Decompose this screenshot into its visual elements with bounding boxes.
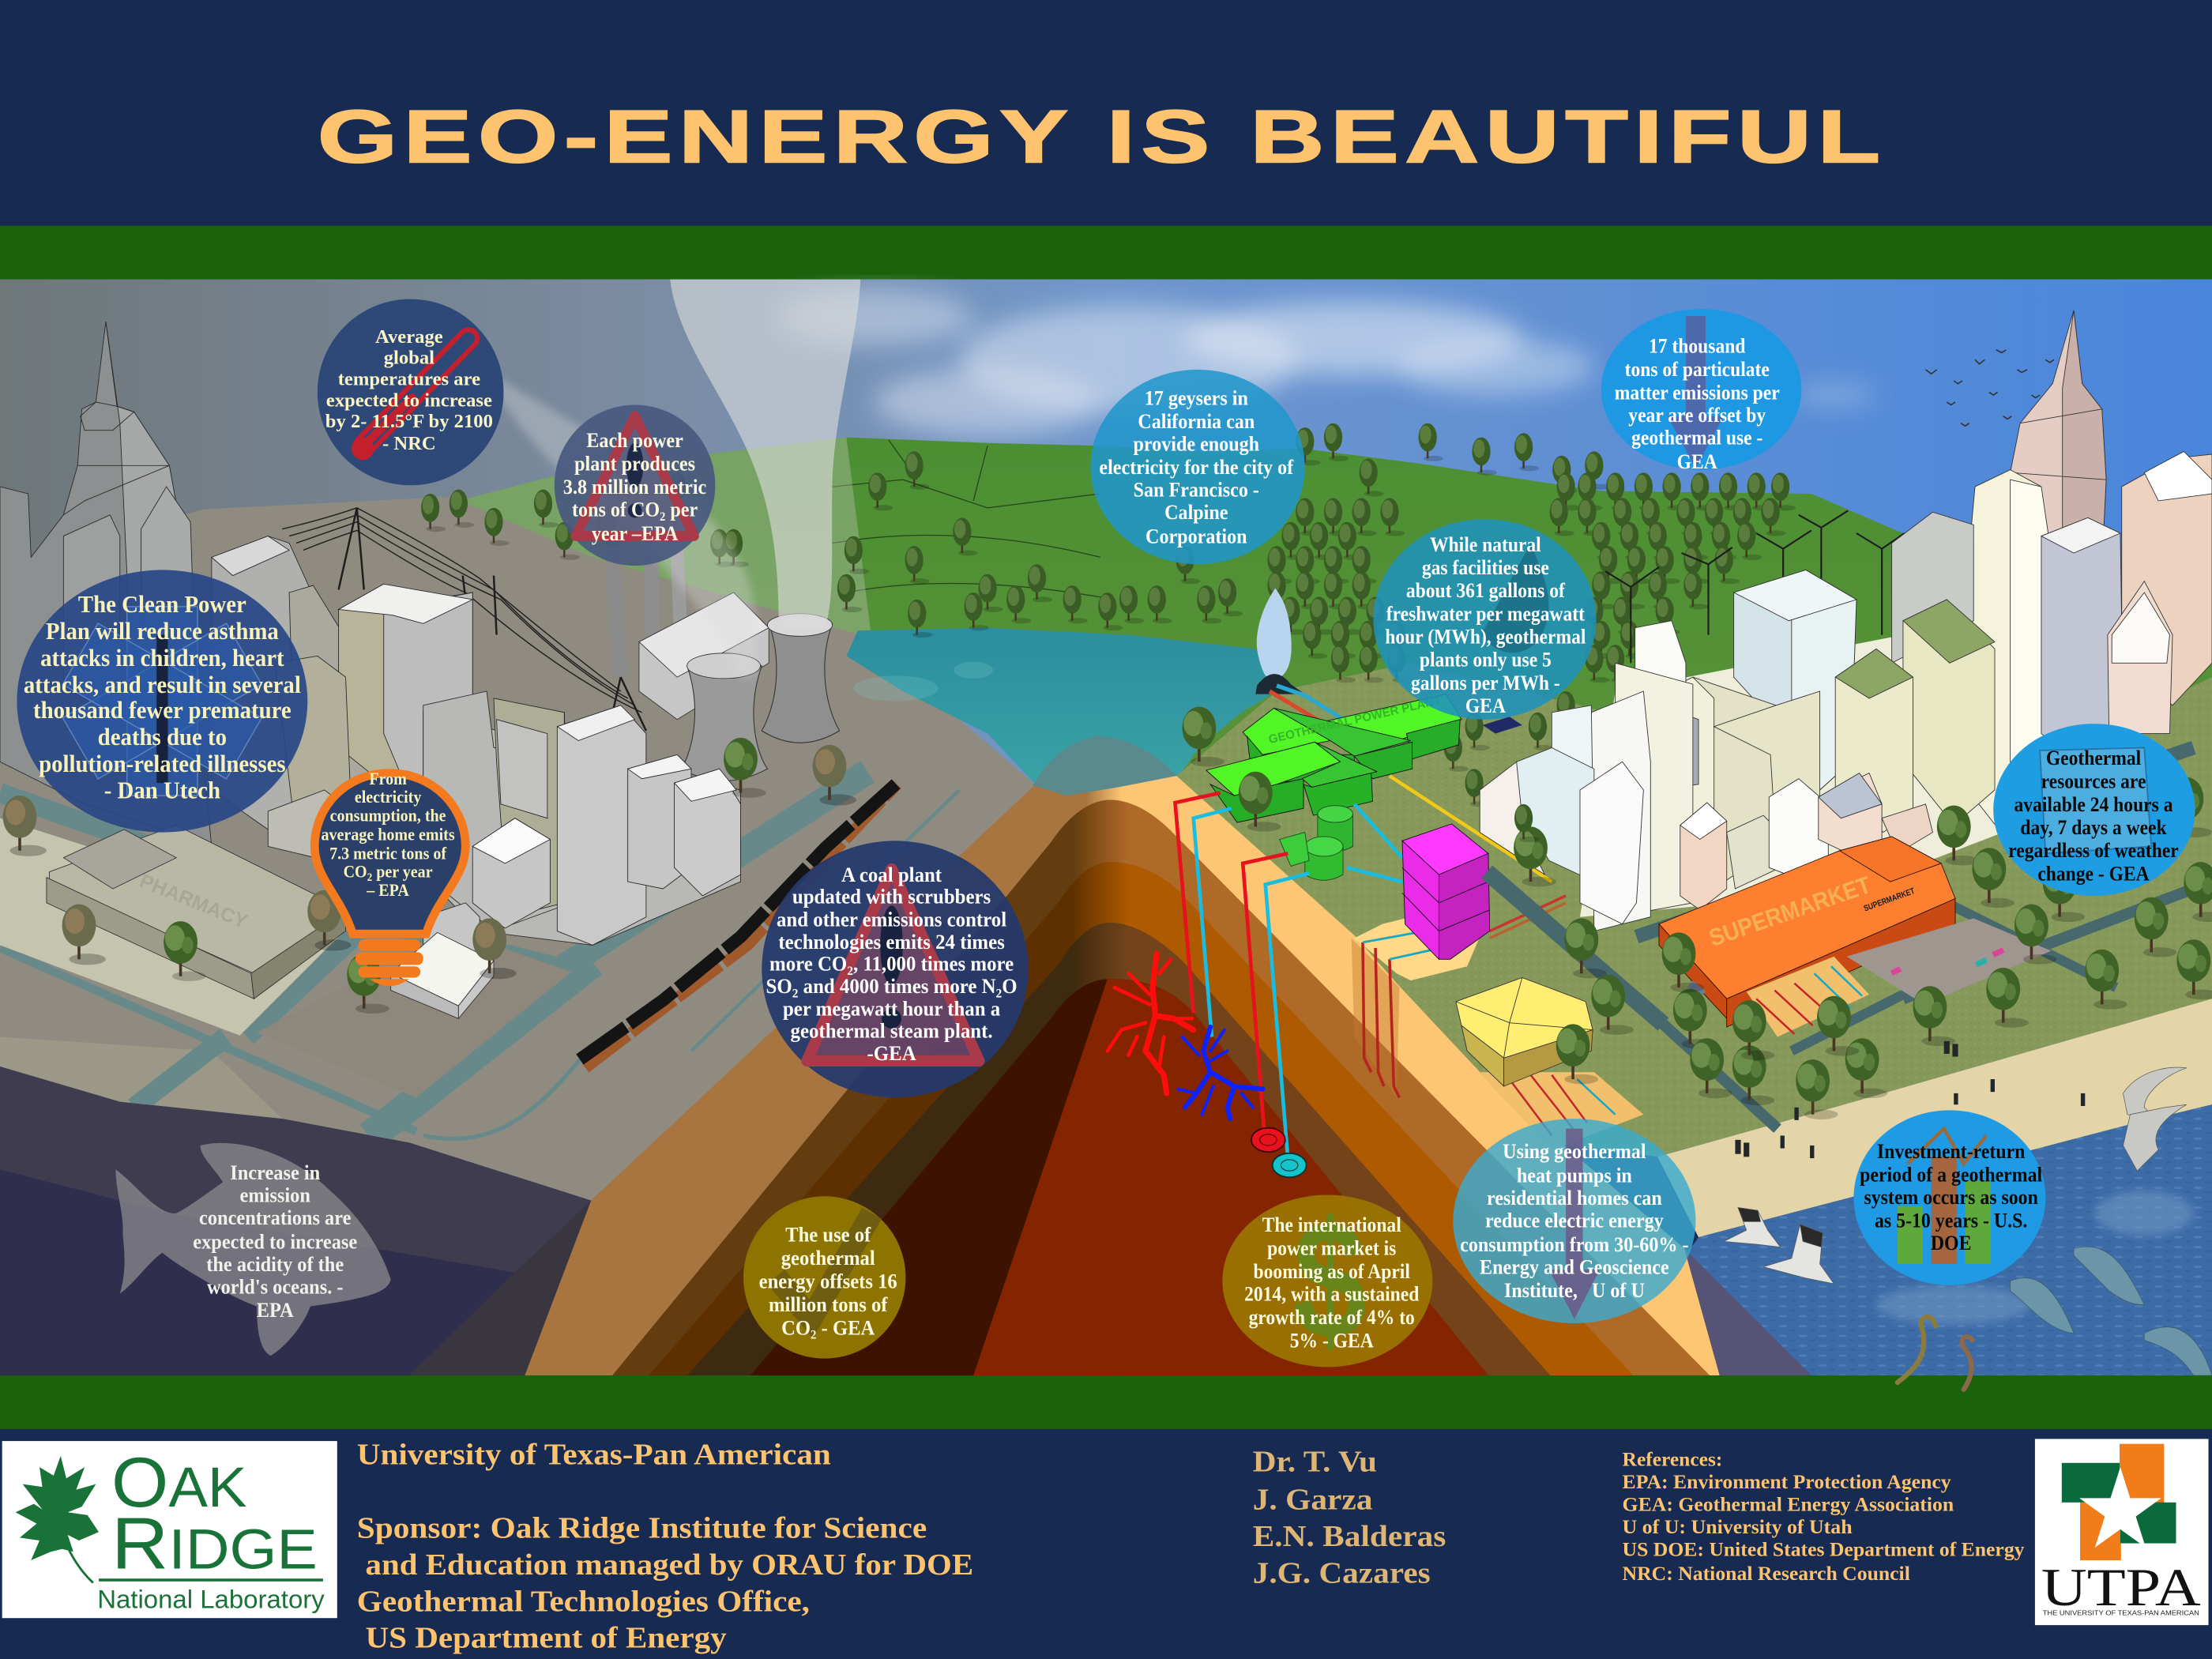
bubble: coal plant comparison: , 11,000 times more: [853, 953, 1014, 976]
icon: dollar sign: $: [1293, 1187, 1367, 1373]
callout: fish ocean acidity: EPA: [257, 1298, 294, 1322]
bubble: international power market: [1222, 1187, 1432, 1373]
author names: [1253, 1446, 1446, 1590]
geyser: [1255, 589, 1354, 734]
right sea: [1687, 1104, 2212, 1375]
right grass plain: [1176, 663, 2212, 1157]
bubble: coal plant comparison: 2: [996, 987, 1002, 1001]
bubble: coal plant comparison: O: [1002, 976, 1018, 998]
bubble: international power market: 5% - GEA: [1290, 1330, 1374, 1352]
bubble: each power plant: Each power: [586, 428, 683, 452]
icon: star of life: [62, 607, 261, 796]
bubble: clean power plan: The Clean Power: [78, 592, 246, 618]
dark shore and sea left: [0, 1066, 591, 1375]
icon: down arrow: [1668, 316, 1724, 468]
bubble: 24-hour resources: change - GEA: [2037, 863, 2150, 886]
bubble: 17 geysers: Calpine: [1164, 500, 1228, 524]
logo: UTPA: UTPA: [2041, 1558, 2201, 1617]
bubble: coal plant comparison: -GEA: [867, 1043, 916, 1065]
bubble: investment return: system occurs as soon: [1864, 1186, 2038, 1209]
solar panels: [1483, 717, 1522, 734]
right city streets: [1487, 747, 2212, 1129]
bubble: clean power plan: attacks, and result in several: [24, 672, 301, 698]
bubble: each power plant: 2: [660, 510, 665, 524]
references: NRC: National Research Council: [1623, 1563, 1910, 1585]
callout: fish ocean acidity: world's oceans. -: [207, 1274, 343, 1299]
pharmacy lot: [0, 818, 346, 1036]
lake: [846, 628, 1277, 786]
footer background: [0, 1429, 2212, 1659]
bubble: light bulb home emissions: average home emits: [322, 825, 455, 845]
bubble: light bulb home emissions: From: [369, 769, 407, 788]
sponsor text block: Geothermal Technologies Office,: [357, 1585, 810, 1618]
references: US DOE: United States Department of Energy: [1623, 1540, 2025, 1561]
parked cars: [1687, 947, 2004, 998]
bubble: thermometer global temperatures: by 2- 11.5°F by 2100: [325, 411, 493, 432]
bubble: 17 geysers: electricity for the city of: [1099, 455, 1294, 479]
bubble: coal plant comparison: and 4000 times more N: [798, 976, 996, 998]
bubble: light bulb home emissions: CO: [344, 862, 433, 883]
logo: Oak Ridge National Laboratory: National Laboratory: [97, 1586, 325, 1614]
coal train: [580, 781, 899, 1068]
bubble: 17 geysers: 17 geysers in: [1145, 386, 1248, 410]
shoals of fish in the lake: [853, 662, 993, 702]
bubble: light bulb home emissions: consumption, the: [330, 806, 446, 825]
references: [1623, 1449, 2025, 1585]
title: GEO-ENERGY IS BEAUTIFUL: [318, 95, 1887, 179]
pharmacy building: PHARMACY: [137, 870, 250, 933]
bubble: natural gas versus geothermal water use: plants only use 5: [1420, 649, 1552, 672]
bubble: each power plant: [555, 404, 715, 566]
bubble: particulate matter offset: [1601, 309, 1801, 473]
bubble: international power market: 2014, with a sustained: [1244, 1283, 1419, 1306]
bubble: 24-hour resources: regardless of weather: [2008, 840, 2179, 862]
bubble: each power plant: per: [665, 497, 698, 521]
plant tree front: [1239, 772, 1281, 832]
sponsor text block: Sponsor: Oak Ridge Institute for Science: [357, 1511, 927, 1544]
bubble: particulate matter offset: year are offset by: [1628, 404, 1766, 427]
bubble: each power plant: plant produces: [574, 451, 695, 476]
mound above the cross-section: [1033, 736, 1176, 799]
purple wedge: [1684, 1248, 1811, 1375]
cross-section earth layers: [525, 776, 1720, 1375]
references: GEA: Geothermal Energy Association: [1623, 1494, 1954, 1515]
icon: calendar: [2040, 747, 2151, 853]
icon: water drop: [1481, 544, 1548, 653]
bubble: geothermal heat pumps: consumption from 30-60% -: [1460, 1232, 1689, 1256]
green hillside: [438, 438, 2212, 1016]
sky: [0, 280, 2212, 844]
yellow house: [1456, 978, 1593, 1086]
logo: UTPA: THE UNIVERSITY OF TEXAS-PAN AMERICAN: [2043, 1610, 2199, 1617]
blue fracture tree: [1178, 1027, 1262, 1119]
header background: [0, 0, 2212, 226]
sponsor text block: US Department of Energy: [365, 1622, 727, 1655]
bubble: geothermal heat pumps: residential homes can: [1487, 1186, 1662, 1209]
bubble: natural gas versus geothermal water use: While natural: [1430, 534, 1541, 557]
icon: fish silhouette: [115, 1143, 391, 1356]
front trees: [1514, 777, 2212, 1119]
bubble: geothermal offsets CO2: - GEA: [816, 1315, 875, 1340]
bubble: natural gas versus geothermal water use: GEA: [1465, 694, 1507, 717]
red fracture tree: [1108, 954, 1194, 1093]
references: U of U: University of Utah: [1623, 1517, 1853, 1538]
bubble: international power market: The international: [1262, 1214, 1401, 1236]
pipe terminals: [1251, 1128, 1307, 1177]
author names: J. Garza: [1253, 1484, 1373, 1517]
bubble: international power market: growth rate of 4% to: [1249, 1307, 1415, 1329]
top green band: [0, 226, 2212, 280]
bubble: investment return: DOE: [1931, 1232, 1971, 1255]
icon: light bulb: [314, 773, 465, 986]
bubble: natural gas versus geothermal water use: hour (MWh), geothermal: [1385, 626, 1586, 649]
bubble: clean power plan: attacks in children, heart: [40, 645, 284, 672]
magenta building: [1402, 824, 1490, 959]
bubble: thermometer global temperatures: Average: [375, 326, 443, 348]
hillside trees: [421, 423, 1796, 807]
haze over left hillside: [438, 438, 875, 663]
bubble: natural gas versus geothermal water use: freshwater per megawatt: [1386, 603, 1586, 626]
bubble: particulate matter offset: 17 thousand: [1649, 335, 1745, 358]
bubble: geothermal offsets CO2: The use of: [785, 1222, 871, 1247]
transmission lines: [282, 508, 646, 731]
yellow utility line: [1390, 776, 1552, 882]
icon: warning triangle: [576, 416, 694, 536]
icon: warning triangle: [807, 869, 979, 1061]
icon: thermometer: [352, 339, 468, 460]
bubble: coal plant comparison: [762, 841, 1029, 1097]
bubble: thermometer global temperatures: temperatures are: [338, 368, 480, 389]
ground loops: [1478, 957, 1869, 1149]
bubble: light bulb home emissions: 7.3 metric tons of: [329, 844, 447, 863]
bubble: geothermal offsets CO2: [743, 1196, 905, 1359]
bottom green band: [0, 1375, 2212, 1429]
bubble: clean power plan: thousand fewer premature: [33, 698, 292, 724]
bubble: coal plant comparison: A coal plant: [841, 864, 942, 886]
logo: Oak Ridge National Laboratory: OAK: [111, 1443, 246, 1522]
right sand beach: [1657, 999, 2212, 1237]
bubble: clean power plan: - Dan Utech: [104, 778, 221, 804]
sponsor text block: [357, 1439, 973, 1655]
bubble: light bulb home emissions: [314, 769, 465, 986]
bubble: particulate matter offset: geothermal use -: [1631, 427, 1762, 450]
bubble: international power market: power market is: [1267, 1237, 1396, 1260]
bubble: coal plant comparison: and other emissions control: [777, 908, 1006, 931]
callout: fish ocean acidity: concentrations are: [199, 1206, 351, 1229]
right city buildings: [1480, 310, 2212, 931]
logo: Oak Ridge National Laboratory: [2, 1441, 337, 1618]
bubble: each power plant: year –EPA: [592, 521, 679, 545]
pharmacy building: [47, 826, 346, 999]
bubble: clean power plan: deaths due to: [98, 724, 227, 750]
bubble: geothermal heat pumps: Using geothermal: [1503, 1139, 1646, 1163]
hill field lines: [833, 440, 1115, 600]
bubble: thermometer global temperatures: - NRC: [382, 433, 436, 454]
bubble: natural gas versus geothermal water use: about 361 gallons of: [1406, 580, 1565, 603]
callout: fish ocean acidity: the acidity of the: [206, 1252, 344, 1276]
bubble: 17 geysers: [1090, 370, 1305, 564]
author names: E.N. Balderas: [1253, 1520, 1446, 1553]
supermarket: SUPERMARKET: [1863, 886, 1917, 913]
left street trees: [3, 738, 856, 1014]
icon: down arrow: [1549, 1129, 1600, 1319]
parking lot: [1847, 918, 2051, 1004]
bubble: geothermal heat pumps: Energy and Geoscience: [1480, 1255, 1669, 1279]
bubble: each power plant: tons of CO: [572, 497, 698, 524]
bubble: light bulb home emissions: per year: [372, 862, 433, 882]
birds in the sky: [1926, 350, 2054, 426]
bubble: thermometer global temperatures: [318, 299, 504, 485]
bubble: thermometer global temperatures: global: [384, 348, 434, 369]
bubble: 17 geysers: San Francisco -: [1134, 477, 1259, 502]
callout: fish ocean acidity: [115, 1143, 391, 1356]
bubble: light bulb home emissions: electricity: [355, 787, 422, 807]
geothermal power plant: [1206, 694, 1462, 822]
callout: fish ocean acidity: emission: [240, 1183, 310, 1207]
bubble: coal plant comparison: more CO: [769, 953, 1014, 978]
bubble: investment return: period of a geothermal: [1860, 1163, 2042, 1187]
house lot: [257, 930, 571, 1097]
bubble: coal plant comparison: 2: [847, 965, 853, 978]
geothermal power plant: GEOTHERMAL POWER PLANT: [1267, 694, 1443, 747]
power plant with chimneys and cooling towers: [605, 536, 839, 781]
bubble: particulate matter offset: matter emissions per: [1615, 382, 1780, 404]
sponsor text block: University of Texas-Pan American: [357, 1439, 831, 1472]
bubble: geothermal offsets CO2: CO: [781, 1315, 875, 1342]
bubble: thermometer global temperatures: expected to increase: [326, 389, 492, 411]
left ground: [0, 497, 1036, 1201]
bubble: coal plant comparison: SO: [766, 976, 1018, 1001]
bubble: coal plant comparison: 2: [792, 987, 799, 1001]
bubble: geothermal offsets CO2: million tons of: [769, 1292, 888, 1316]
bubble: 24-hour resources: day, 7 days a week: [2020, 817, 2167, 840]
author names: J.G. Cazares: [1253, 1557, 1431, 1590]
bubble: 24-hour resources: Geothermal: [2046, 747, 2141, 769]
people on beach: [1735, 1041, 2085, 1158]
smoke plumes: [480, 280, 860, 677]
callout: fish ocean acidity: Increase in: [230, 1161, 320, 1184]
callout: fish ocean acidity: expected to increase: [193, 1229, 357, 1254]
bubble: geothermal offsets CO2: geothermal: [781, 1246, 875, 1270]
bubble: particulate matter offset: GEA: [1677, 451, 1717, 473]
bubble: geothermal heat pumps: Institute, U of U: [1504, 1278, 1645, 1302]
wind turbines: [1605, 510, 1905, 663]
logo: UTPA: [2035, 1439, 2209, 1625]
bubble: 17 geysers: California can: [1138, 409, 1255, 433]
icon: bar chart with trend arrow: [1898, 1129, 1991, 1264]
storage tanks: [1280, 806, 1352, 880]
bubble: investment return: Investment-return: [1877, 1140, 2025, 1163]
bubble: 17 geysers: Corporation: [1146, 524, 1247, 548]
bubble: 17 geysers: provide enough: [1134, 431, 1259, 456]
bubble: geothermal heat pumps: [1453, 1119, 1695, 1323]
left city buildings: [0, 322, 741, 973]
bubble: each power plant: 3.8 million metric: [563, 475, 706, 498]
bubble: clean power plan: [17, 570, 307, 833]
small white house: [391, 932, 494, 1018]
streets left: [0, 772, 959, 1138]
ground loop notch near magenta building: [1352, 917, 1488, 1097]
bubble: light bulb home emissions: – EPA: [366, 880, 409, 900]
bubble: clean power plan: pollution-related illnesses: [39, 751, 286, 777]
bubble: natural gas versus geothermal water use: [1373, 519, 1597, 720]
gulls: [1724, 1067, 2187, 1284]
bubble: investment return: [1853, 1110, 2045, 1285]
bubble: clean power plan: Plan will reduce asthma: [46, 619, 279, 645]
bubble: 24-hour resources: [1993, 724, 2195, 896]
bubble: light bulb home emissions: 2: [367, 871, 372, 883]
supermarket: [1659, 837, 1955, 1027]
bubble: coal plant comparison: geothermal steam plant.: [791, 1020, 993, 1043]
bubble: coal plant comparison: technologies emits 24 times: [778, 931, 1005, 954]
bubble: natural gas versus geothermal water use: gallons per MWh -: [1411, 672, 1560, 695]
bubble: geothermal offsets CO2: 2: [811, 1328, 817, 1342]
bubble: geothermal heat pumps: reduce electric energy: [1485, 1208, 1664, 1232]
icon: oak leaf: [16, 1456, 99, 1583]
bubble: coal plant comparison: updated with scrubbers: [792, 886, 991, 908]
bubble: 24-hour resources: available 24 hours a: [2014, 793, 2173, 816]
scene: cutaway landscape illustration: [0, 280, 2212, 1375]
sponsor text block: and Education managed by ORAU for DOE: [365, 1548, 973, 1582]
references: EPA: Environment Protection Agency: [1623, 1472, 1951, 1493]
dolphins: [2011, 1247, 2212, 1375]
author names: Dr. T. Vu: [1253, 1446, 1377, 1479]
bubble: international power market: booming as of April: [1254, 1261, 1410, 1283]
geothermal pipes: [1176, 793, 1566, 1160]
bubble: 24-hour resources: resources are: [2041, 770, 2146, 793]
references: References:: [1623, 1449, 1722, 1470]
seahorses: [1898, 1317, 1972, 1390]
bubble: geothermal offsets CO2: energy offsets 16: [759, 1269, 897, 1293]
supermarket: SUPERMARKET: [1706, 872, 1875, 952]
bubble: coal plant comparison: per megawatt hour than a: [783, 998, 1000, 1021]
bubble: particulate matter offset: tons of particulate: [1625, 359, 1770, 381]
icon: check mark: [776, 1213, 872, 1319]
bubble: investment return: as 5-10 years - U.S.: [1875, 1209, 2027, 1232]
bubble: geothermal heat pumps: heat pumps in: [1517, 1163, 1632, 1187]
sea shoals: [1876, 1191, 2194, 1325]
plant tree: [1182, 707, 1224, 767]
logo: Oak Ridge National Laboratory: RIDGE: [111, 1503, 318, 1585]
bubble: natural gas versus geothermal water use: gas facilities use: [1422, 556, 1549, 579]
